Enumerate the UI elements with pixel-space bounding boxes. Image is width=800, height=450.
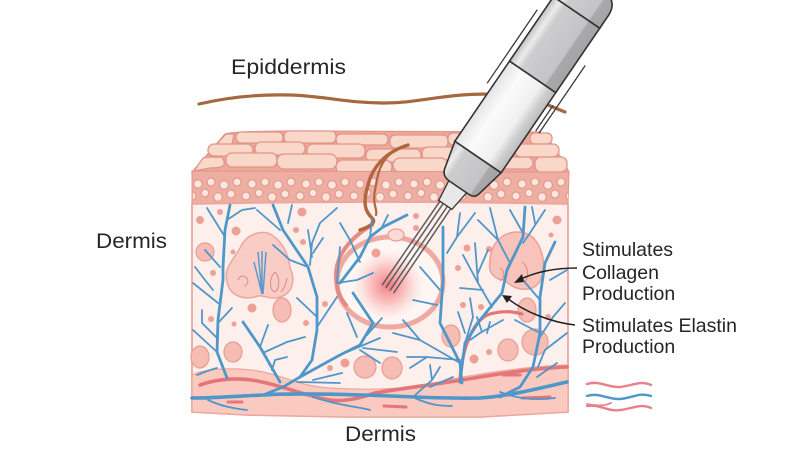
injection ring with glow <box>337 237 443 327</box>
bottom label: Dermis: Dermis <box>345 423 416 446</box>
callout: elastin: Production <box>582 336 675 358</box>
main lower vessels <box>192 382 567 398</box>
top cap <box>553 0 636 28</box>
grey lower cap <box>435 141 501 203</box>
brown epidermis line <box>199 94 565 112</box>
arrow: collagen <box>514 268 577 283</box>
microneedle pen device <box>360 0 644 310</box>
red blood cells and dots <box>191 229 548 379</box>
red vessels <box>200 312 567 407</box>
bubble cell layer <box>192 171 569 204</box>
callout: collagen: Production <box>582 283 675 305</box>
bottom hypodermis band <box>192 365 568 417</box>
motion lines <box>480 10 596 133</box>
legend wave lines <box>587 383 651 410</box>
trunks <box>217 205 555 397</box>
branches <box>193 205 567 397</box>
right gland <box>490 232 544 289</box>
callout: collagen: Collagen <box>582 262 659 284</box>
grey upper barrel <box>510 0 600 93</box>
skin cross-section <box>191 131 569 417</box>
left gland <box>226 233 293 298</box>
neck <box>436 179 468 211</box>
arrow: elastin <box>502 295 575 325</box>
callout: elastin: Stimulates Elastin <box>582 315 737 337</box>
callout: collagen: Stimulates <box>582 239 673 261</box>
hair follicle <box>336 145 408 305</box>
left label: Dermis: Dermis <box>96 230 167 253</box>
blue vessel network <box>192 205 567 410</box>
dermis background <box>192 202 568 417</box>
needles <box>382 196 454 293</box>
white barrel <box>455 61 556 173</box>
heading: Epiddermis: Epiddermis <box>231 56 346 79</box>
epidermis top cell layer <box>192 131 569 174</box>
